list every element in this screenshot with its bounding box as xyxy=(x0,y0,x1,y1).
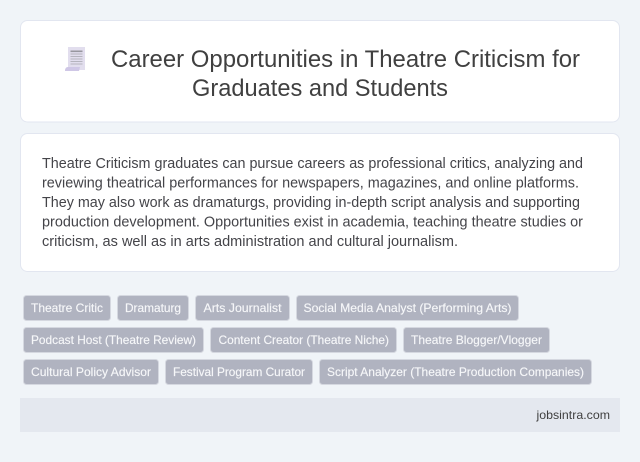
tag: Content Creator xyxy=(210,328,396,352)
tag: Social Media Analyst: Social Media Analyst (Performing Arts) xyxy=(304,301,512,315)
tag: Theatre Critic: Theatre Critic xyxy=(31,301,103,315)
heading: Career Opportunities in Theatre Criticism for xyxy=(111,46,580,73)
tag: Script Analyzer xyxy=(320,360,592,384)
tag: Script Analyzer: Script Analyzer (Theatre Production Companies) xyxy=(327,365,584,379)
icon: scroll document xyxy=(65,47,85,71)
text block: description: production development. Opportunities exist in academia, teaching theatre studies or xyxy=(42,214,583,230)
tag: Arts Journalist: Arts Journalist xyxy=(204,301,282,315)
tag: Dramaturg xyxy=(118,296,188,320)
text block: description: They may also work as dramaturgs, providing in-depth script analysis and supporting xyxy=(42,194,580,211)
tag: Podcast Host xyxy=(24,328,204,352)
text block: description: criticism, as well as in arts administration and cultural journalism. xyxy=(42,233,458,250)
tag: Festival Program Curator xyxy=(166,360,312,384)
heading: Graduates and Students xyxy=(192,75,448,102)
tag: Cultural Policy Advisor: Cultural Policy Advisor xyxy=(31,365,151,379)
text block: description xyxy=(42,155,583,250)
panel: title card xyxy=(20,20,620,122)
tag: Theatre Blogger/Vlogger xyxy=(404,328,550,352)
panel: description card xyxy=(20,134,620,272)
tags: career roles xyxy=(24,296,592,384)
tag: Dramaturg: Dramaturg xyxy=(125,301,181,315)
heading xyxy=(111,46,580,102)
text block: description: reviewing theatrical performances for newspapers, magazines, and online platforms. xyxy=(42,174,579,192)
tag: Social Media Analyst xyxy=(296,296,518,320)
tag: Cultural Policy Advisor xyxy=(24,360,158,384)
text block: description: Theatre Criticism graduates can pursue careers as professional critics, analyzing and xyxy=(42,155,583,172)
footer text: source: jobsintra.com xyxy=(535,408,610,422)
tag: Podcast Host: Podcast Host (Theatre Review) xyxy=(31,333,196,347)
tag: Theatre Blogger/Vlogger: Theatre Blogger/Vlogger xyxy=(411,333,542,347)
tag: Content Creator: Content Creator (Theatre Niche) xyxy=(218,333,389,347)
tag: Theatre Critic xyxy=(24,296,110,320)
footer bar xyxy=(20,398,620,432)
tag: Arts Journalist xyxy=(196,296,290,320)
tag: Festival Program Curator: Festival Program Curator xyxy=(173,365,305,379)
